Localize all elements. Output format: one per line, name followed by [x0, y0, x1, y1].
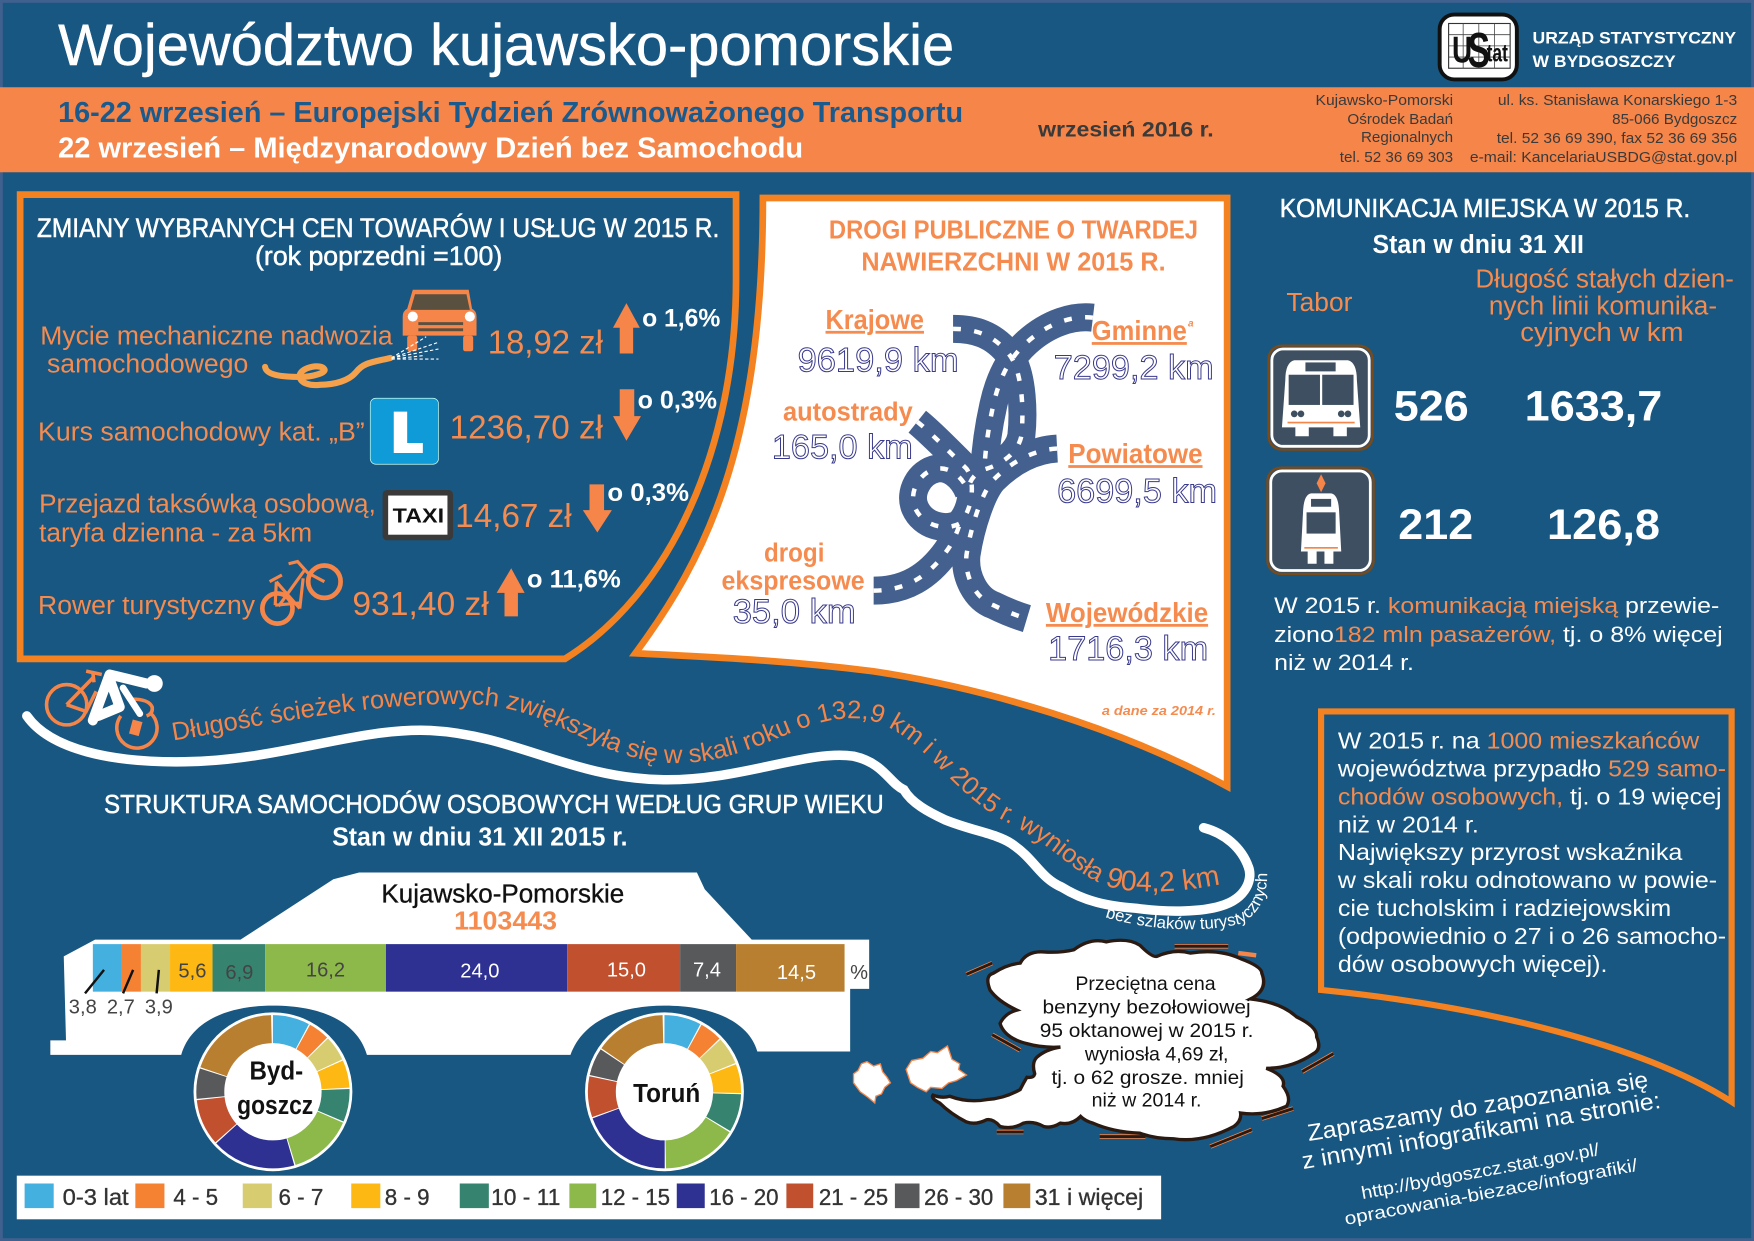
contact details: Kujawsko-Pomorski [1316, 92, 1453, 109]
column labels: Tabor [1286, 289, 1353, 317]
row: car wash: samochodowego [47, 351, 248, 379]
road labels [722, 304, 1208, 628]
row: bicycle [38, 562, 621, 624]
row: taxi: taryfa dzienna - za 5km [39, 519, 312, 547]
legend [17, 1176, 1161, 1219]
road labels: Gminne [1092, 315, 1187, 346]
contact details: 85-066 Bydgoszcz [1612, 111, 1737, 128]
column labels: nych linii komunika- [1489, 292, 1717, 320]
row: car wash: 18,92 zł [488, 324, 603, 361]
heading: car structure [104, 790, 884, 852]
contact details [1316, 92, 1737, 166]
contact details: Ośrodek Badań [1347, 111, 1453, 128]
legend: 16 - 20 [709, 1184, 779, 1210]
row: bicycle: 931,40 zł [352, 586, 489, 623]
car label [381, 881, 624, 936]
exhaust cloud callout [854, 940, 1333, 1147]
chart: Bydgoszcz donut: goszcz [237, 1092, 313, 1120]
legend: 10 - 11 [491, 1184, 560, 1210]
legend: 26 - 30 [924, 1184, 993, 1210]
road lengths: 9619,9 km [798, 341, 959, 379]
icon: tram [1267, 468, 1374, 574]
bar values: 24,0 [460, 961, 499, 983]
road footnote: a dane za 2014 r. [1102, 703, 1216, 718]
road interchange illustration [874, 317, 1093, 619]
bar values: 3,8 [69, 996, 97, 1018]
tram figures: 212 [1398, 502, 1473, 549]
panel: price changes [20, 195, 736, 659]
tram figures: 126,8 [1547, 502, 1660, 549]
column labels: cyjnych w km [1520, 319, 1684, 347]
passengers text: ziono 182 mln pasażerów, tj. o 8% więcej [1274, 622, 1723, 647]
office name: URZĄD STATYSTYCZNY [1533, 30, 1736, 48]
callout: passenger cars per 1000 residents: w skali roku odnotowano w powie- [1337, 867, 1717, 893]
office name: W BYDGOSZCZY [1533, 53, 1676, 71]
icon: cyclist [47, 671, 163, 748]
passengers text: niż w 2014 r. [1274, 650, 1414, 675]
row: bicycle: o 11,6% [527, 566, 621, 593]
panel heading: (rok poprzedni =100) [255, 241, 502, 271]
date: wrzesień 2016 r. [1037, 117, 1214, 141]
road labels: Krajowe [826, 304, 924, 335]
row: car wash: o 1,6% [642, 306, 721, 333]
bus figures: 526 [1394, 384, 1469, 431]
column labels [1286, 265, 1734, 347]
row: car wash [40, 290, 721, 385]
callout: passenger cars per 1000 residents: W 2015 r. na 1000 mieszkańców [1338, 727, 1700, 753]
logo: Urząd Statystyczny: S [1468, 23, 1490, 78]
exhaust cloud callout: benzyny bezołowiowej [1043, 996, 1251, 1018]
logo: Urząd Statystyczny [1440, 15, 1517, 79]
title: Województwo kujawsko-pomorskie [58, 13, 954, 78]
logo: Urząd Statystyczny: tat [1487, 41, 1508, 68]
exhaust cloud callout: 95 oktanowej w 2015 r. [1040, 1020, 1253, 1042]
bar values: 16,2 [306, 960, 345, 982]
bar values: 6,9 [225, 962, 253, 984]
office name [1533, 30, 1736, 71]
icon: bus [1269, 346, 1373, 450]
callout: passenger cars per 1000 residents: województwa przypadło 529 samo- [1337, 755, 1726, 781]
event headings: 22 wrzesień – Międzynarodowy Dzień bez Samochodu [58, 133, 803, 165]
bar values: 14,5 [777, 962, 816, 984]
heading: car structure: STRUKTURA SAMOCHODÓW OSOBOWYCH WEDŁUG GRUP WIEKU [104, 790, 884, 819]
contact details: e-mail: KancelariaUSBDG@stat.gov.pl [1470, 149, 1737, 166]
event headings [58, 97, 963, 165]
row: taxi: Przejazd taksówką osobową, [39, 490, 376, 518]
road lengths: 7299,2 km [1054, 349, 1214, 387]
contact details: tel. 52 36 69 303 [1340, 149, 1453, 166]
row: driving course: o 0,3% [638, 387, 717, 414]
panel heading: DROGI PUBLICZNE O TWARDEJ [829, 216, 1198, 244]
logo: Urząd Statystyczny: U [1452, 30, 1472, 71]
panel: urban transport [1267, 195, 1734, 675]
exhaust cloud callout: Przeciętna cena [1075, 973, 1216, 995]
road lengths: 1716,3 km [1048, 630, 1208, 668]
bike path curve with text: bez szlaków turystycznych [1106, 874, 1268, 931]
row: driving course: 1236,70 zł [450, 410, 603, 447]
panel heading: ZMIANY WYBRANYCH CEN TOWARÓW I USŁUG W 2015 R. [37, 212, 719, 243]
bar values: 5,6 [178, 961, 206, 983]
column labels: Długość stałych dzien- [1475, 265, 1734, 293]
panel heading [829, 216, 1198, 277]
transport heading: Stan w dniu 31 XII [1373, 231, 1584, 259]
callout: passenger cars per 1000 residents: cie tucholskim i radziejowskim [1338, 895, 1671, 921]
legend: 6 - 7 [279, 1184, 323, 1210]
invitation text with link: Zapraszamy do zapoznania się [1306, 1066, 1650, 1146]
bike path curve with text: Długość ścieżek rowerowych zwiększyła się w skali roku o 132,9 km i w 2015 r. wyniosła 904,2 km [172, 686, 1219, 896]
panel heading: NAWIERZCHNI W 2015 R. [861, 249, 1166, 277]
bar values [69, 960, 868, 1018]
bar values: % [850, 962, 868, 984]
row: taxi [39, 480, 689, 547]
contact details: tel. 52 36 69 390, fax 52 36 69 356 [1497, 130, 1737, 147]
chart: car silhouette with stacked bar [50, 873, 869, 1055]
transport heading: KOMUNIKACJA MIEJSKA W 2015 R. [1280, 195, 1690, 223]
bus figures: 1633,7 [1525, 384, 1662, 431]
panel: public roads [635, 198, 1227, 786]
transport heading [1280, 195, 1690, 259]
road lengths: 35,0 km [733, 593, 856, 631]
row: taxi: o 0,3% [607, 480, 689, 507]
road lengths [733, 341, 1217, 668]
road labels: Powiatowe [1068, 438, 1203, 469]
legend: 21 - 25 [819, 1184, 888, 1210]
invitation text with link: http://bydgoszcz.stat.gov.pl/ [1360, 1139, 1601, 1203]
road labels: Wojewódzkie [1046, 597, 1208, 628]
road labels: autostrady [783, 399, 913, 427]
invitation text with link [1300, 1066, 1662, 1229]
stacked bar segments [93, 944, 845, 992]
row: bicycle: Rower turystyczny [38, 592, 255, 620]
exhaust cloud callout: tj. o 62 grosze. mniej [1052, 1067, 1244, 1089]
row: driving course: Kurs samochodowy kat. „B” [38, 419, 365, 447]
car label: Kujawsko-Pomorskie [381, 881, 624, 909]
exhaust cloud callout: niż w 2014 r. [1092, 1089, 1202, 1111]
callout: passenger cars per 1000 residents [1321, 711, 1732, 1102]
row: car wash: Mycie mechaniczne nadwozia [40, 323, 393, 351]
row: driving course [38, 387, 717, 464]
callout: passenger cars per 1000 residents: (odpowiednio o 27 i o 26 samocho- [1338, 923, 1726, 949]
road lengths: 6699,5 km [1057, 472, 1217, 510]
bar values: 2,7 [107, 996, 135, 1018]
road labels: a [1188, 319, 1194, 330]
heading: car structure: Stan w dniu 31 XII 2015 r. [332, 824, 628, 852]
row: taxi: TAXI [393, 505, 444, 527]
bar values: 15,0 [607, 960, 646, 982]
callout: passenger cars per 1000 residents: niż w 2014 r. [1338, 811, 1479, 837]
legend: 12 - 15 [601, 1184, 670, 1210]
chart: Bydgoszcz donut: Byd- [249, 1057, 303, 1085]
contact details: Regionalnych [1361, 129, 1453, 146]
bar values: 7,4 [693, 960, 721, 982]
tram figures [1398, 502, 1660, 549]
row: taxi: 14,67 zł [455, 498, 572, 535]
invitation text with link: z innymi infografikami na stronie: [1300, 1087, 1662, 1174]
callout: passenger cars per 1000 residents: Największy przyrost wskaźnika [1338, 839, 1683, 865]
callout: passenger cars per 1000 residents: chodów osobowych, tj. o 19 więcej [1338, 783, 1722, 809]
orange header band [0, 87, 1754, 172]
bar values: 3,9 [145, 996, 173, 1018]
passengers text [1274, 593, 1723, 675]
road lengths: 165,0 km [772, 429, 913, 467]
chart: Toruń donut [585, 1012, 744, 1171]
callout: passenger cars per 1000 residents: dów osobowych więcej). [1338, 951, 1607, 977]
road labels: ekspresowe [722, 568, 865, 596]
legend: 31 i więcej [1035, 1184, 1143, 1210]
bus figures [1394, 384, 1662, 431]
event headings: 16-22 wrzesień – Europejski Tydzień Zrównoważonego Transportu [58, 97, 963, 129]
chart: Bydgoszcz donut [194, 1012, 352, 1171]
legend: 4 - 5 [173, 1184, 218, 1210]
invitation text with link: opracowania-biezace/infografiki/ [1343, 1155, 1639, 1229]
car label: 1103443 [454, 908, 557, 936]
road labels: drogi [764, 540, 824, 568]
passengers text: W 2015 r. komunikacją miejską przewie- [1274, 593, 1719, 618]
legend: 8 - 9 [385, 1184, 430, 1210]
legend: 0-3 lat [63, 1184, 129, 1210]
contact details: ul. ks. Stanisława Konarskiego 1-3 [1498, 92, 1737, 109]
panel heading [37, 212, 719, 271]
exhaust cloud callout: wyniosła 4,69 zł, [1084, 1043, 1228, 1065]
chart: Toruń donut: Toruń [633, 1080, 700, 1108]
